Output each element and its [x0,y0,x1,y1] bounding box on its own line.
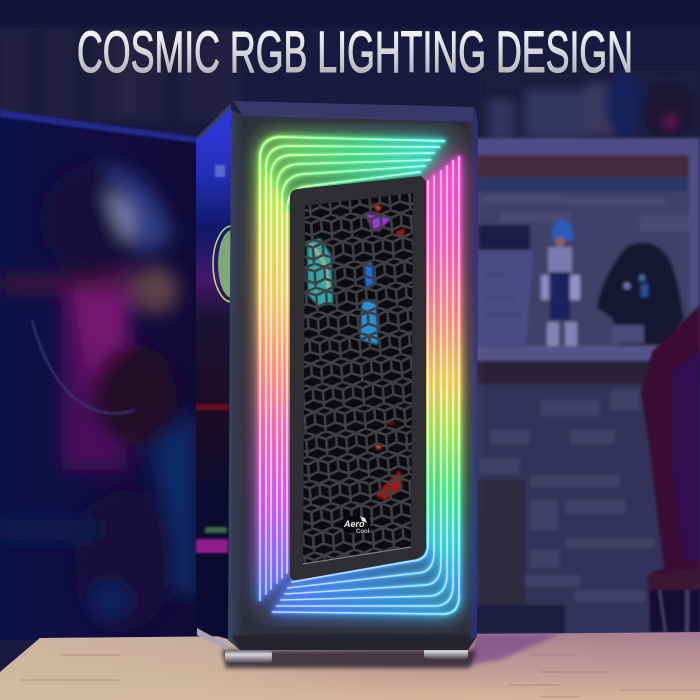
Aerocool logo: Cool [356,529,370,535]
figurine: card [478,225,534,345]
Aerocool logo [343,516,370,535]
side panel lights [196,165,251,553]
monitor top edge [0,110,196,143]
PC case front [228,101,478,650]
side glass panel [196,103,251,650]
shelf uprights [470,138,700,155]
lower brick wall [470,360,700,637]
hexagonal mesh grid [303,193,413,563]
light colour lines [260,137,459,614]
internal fans seen through mesh [307,203,405,500]
recessed plate [250,124,468,626]
central mesh panel [290,176,426,580]
monitor artwork blurred [0,165,196,630]
case shadow on table [222,650,476,668]
bottom bevel [232,634,477,650]
Aerocool logo: Aero [343,519,365,529]
front face [228,110,478,650]
mesh holes [303,193,413,563]
gaming chair [641,305,700,632]
figurine: blue-haired fighter [541,218,580,346]
wooden table [0,632,700,700]
middle shelf wall [470,138,700,361]
RGB infinity mirror lights [260,137,459,614]
case feet [225,647,468,663]
glow layer [260,137,459,614]
upper shelf collectibles [480,70,700,145]
top bevel [233,101,478,122]
figurine: black helmet [597,243,684,345]
curtain behind monitor [0,28,240,118]
bright line cores [260,137,459,614]
monitor on the left [0,110,196,640]
